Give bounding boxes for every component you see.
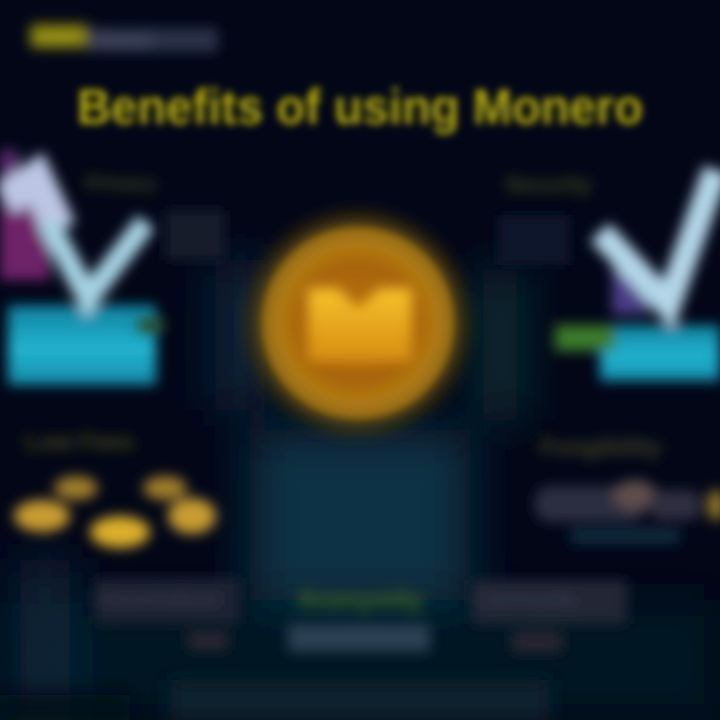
central coin (252, 217, 464, 429)
text block: left top caption: Privacy (85, 173, 157, 195)
logo label: XMR (32, 25, 81, 50)
background glow: lower central tower (0, 260, 720, 720)
coin glow (252, 217, 464, 429)
text block: bottom left: Decentralized (97, 589, 219, 611)
text block: bottom centre: Anonymity (298, 584, 423, 614)
text block: bottom right (472, 580, 627, 652)
text block: right lower caption: Fungibility (540, 434, 662, 461)
bottom steps (0, 680, 550, 720)
text block: bottom left (95, 578, 240, 650)
text block: left lower caption: Low Fees (25, 429, 134, 456)
coin body (262, 227, 454, 419)
text block: bottom centre (288, 584, 430, 652)
coin symbol (308, 288, 412, 362)
icon: gold coins (14, 476, 216, 548)
text block: right top caption: Security (505, 172, 593, 197)
icon: muted coins (535, 480, 720, 544)
panel: right check icon (555, 170, 720, 381)
logo label (30, 24, 218, 52)
text block: left top caption (85, 173, 225, 332)
panel: left check icon (0, 150, 156, 385)
text block: bottom right: Community (476, 589, 577, 611)
logo label: Wallet (94, 30, 152, 52)
title: Benefits of using Monero (77, 79, 643, 135)
text block: right top caption (498, 172, 593, 265)
